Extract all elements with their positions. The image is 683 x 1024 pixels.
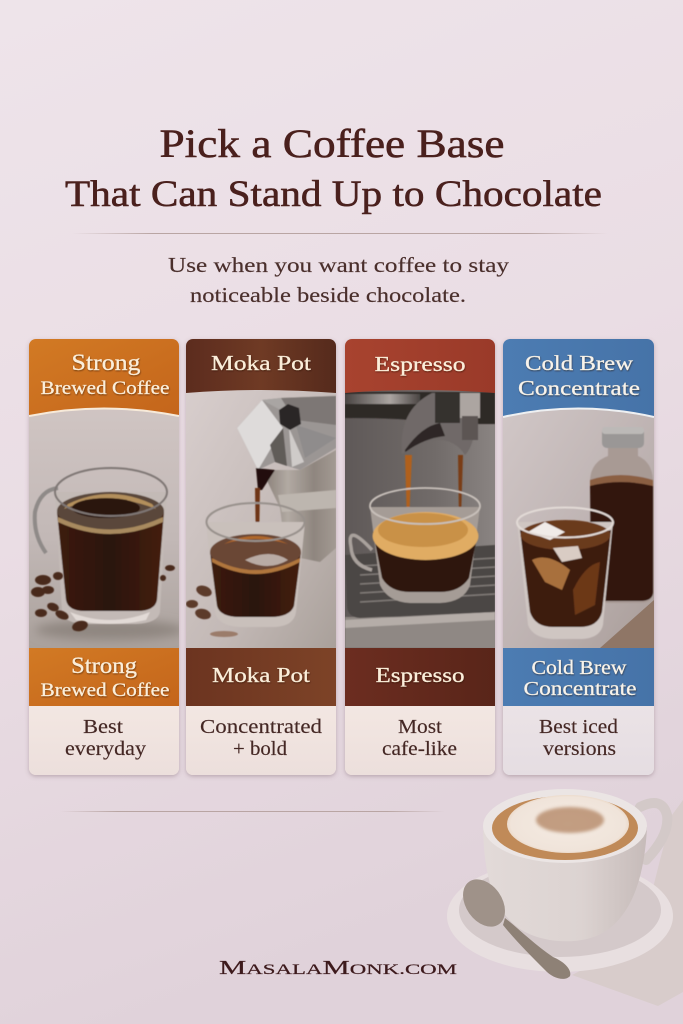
header label: Espresso [374,352,466,376]
coffee beans [186,584,238,637]
caption: everyday [65,738,146,760]
footer brand: M ASALA M ONK.COM [219,958,457,979]
name band: Moka Pot [212,663,310,687]
name band [503,648,654,706]
subtitle: Use when you want coffee to stay [168,253,510,277]
name band [345,648,495,706]
spoon [454,871,570,979]
caption: versions [543,738,616,760]
cup body [483,827,647,941]
panel: espresso [345,339,495,775]
cup handle [640,803,667,860]
panel: strong brewed coffee [29,339,185,775]
subtitle: noticeable beside chocolate. [190,283,466,307]
title: Pick a Coffee Base [160,121,504,166]
caption [506,718,618,774]
coffee beans [31,565,175,633]
photo: glass mug of black coffee [29,405,185,648]
caption [345,706,495,775]
header label: Moka Pot [211,351,311,375]
header band [186,339,336,393]
saucer [447,860,673,972]
photo: cappuccino cup on saucer with spoon and napkin [447,789,683,1006]
panel: cold brew concentrate [503,339,654,775]
header band [345,339,495,393]
caption [186,706,336,775]
caption [29,706,179,760]
title: That Can Stand Up to Chocolate [65,174,602,215]
caption: Best iced [539,716,618,738]
name band: Cold Brew [532,658,626,679]
coffee and foam [492,795,638,860]
caption: cafe-like [382,738,457,760]
caption: Best [83,716,123,738]
caption: + bold [233,738,287,760]
header label [40,354,170,396]
header label: Cold Brew [525,351,634,375]
name band: Concentrate [524,679,636,700]
header label: Concentrate [518,376,640,400]
title [65,121,602,215]
name band [186,648,336,706]
subtitle [168,253,510,307]
napkin [572,800,683,1006]
caption: Most [398,716,442,738]
panel: moka pot [186,339,336,775]
header label: Strong [72,350,141,375]
header band [29,339,179,416]
header label: Brewed Coffee [40,378,170,399]
name band [29,648,179,706]
name band: Espresso [376,663,464,687]
name band: Strong [71,653,138,678]
name band: Brewed Coffee [40,680,170,701]
photo: espresso machine and cup [345,385,495,648]
header label [518,354,640,397]
photo: cold brew bottle and iced glass [503,405,654,648]
caption: Concentrated [200,716,322,738]
header band [503,339,654,417]
photo: moka pot pouring into glass [186,385,336,648]
